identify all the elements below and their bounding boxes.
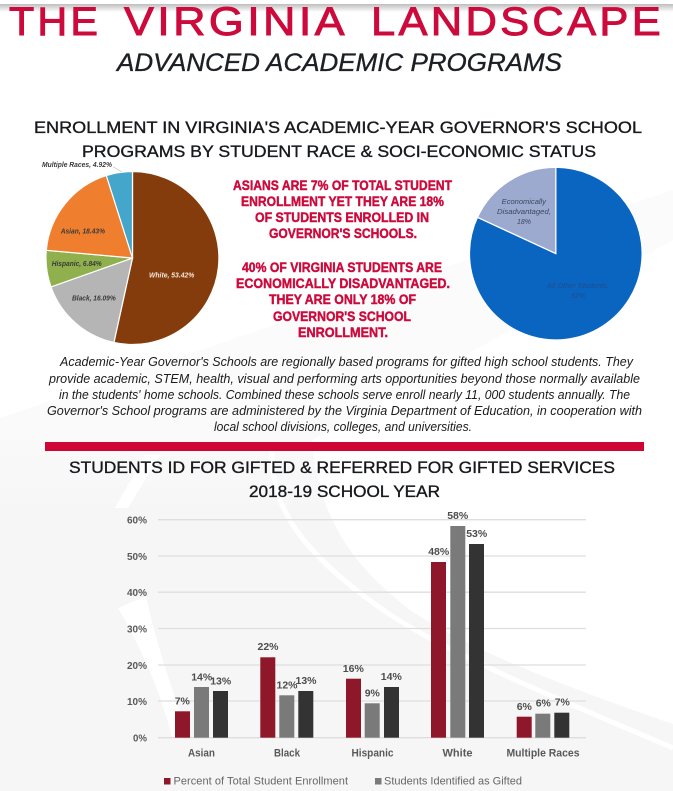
callout: Asian and economic disparity: GOVERNOR'S SCHOOL (273, 308, 411, 324)
data labels: 7% (555, 696, 571, 708)
y axis labels: 10% (127, 696, 148, 708)
data labels: 6% (517, 701, 533, 713)
divider bar (45, 442, 644, 451)
title: VIRGINIA (124, 0, 348, 44)
data labels: 13% (295, 675, 317, 687)
heading: gifted students: 2018-19 SCHOOL YEAR (249, 483, 440, 501)
pie chart: socio-economic status: All Other Students, (546, 283, 609, 290)
legend: Students Identified as Gifted (384, 776, 522, 788)
callout: Asian and economic disparity: OF STUDENTS ENROLLED IN (255, 209, 429, 225)
data labels: 58% (447, 510, 469, 522)
heading: gifted students: STUDENTS ID FOR GIFTED & REFERRED FOR GIFTED SERVICES (69, 459, 615, 477)
title: LANDSCAPE (371, 0, 664, 44)
data labels: 12% (276, 680, 298, 692)
bars: students identified as gifted (194, 526, 550, 738)
callout: Asian and economic disparity: GOVERNOR'S SCHOOLS. (269, 225, 417, 241)
data labels: 7% (175, 696, 191, 708)
callout: Asian and economic disparity: ASIANS ARE 7% OF TOTAL STUDENT (233, 177, 452, 193)
data labels: 16% (343, 663, 364, 675)
data labels (175, 510, 571, 713)
text block: program description: provide academic, STEM, health, visual and performing arts opportunities beyond those normally available (48, 372, 640, 386)
pie chart: enrollment by race: Hispanic, 6.84% (52, 261, 102, 268)
pie chart: socio-economic status: 18% (517, 219, 531, 226)
bar chart: gifted identification by race (127, 510, 586, 788)
callout: Asian and economic disparity: ENROLLMENT. (298, 324, 388, 340)
y axis labels (127, 514, 148, 744)
heading: enrollment: PROGRAMS BY STUDENT RACE & SOCI-ECONOMIC STATUS (82, 143, 596, 161)
category labels: Black (274, 748, 301, 760)
callout: Asian and economic disparity (233, 177, 452, 340)
data labels: 14% (381, 671, 402, 683)
heading: gifted students (69, 459, 615, 501)
subtitle: ADVANCED ACADEMIC PROGRAMS (115, 49, 562, 77)
data labels: 53% (466, 528, 488, 540)
y axis labels: 50% (127, 551, 148, 563)
text block: program description: Governor's School programs are administered by the Virginia Department of Education, in cooperation with (47, 404, 642, 418)
callout: Asian and economic disparity: 40% OF VIRGINIA STUDENTS ARE (242, 259, 442, 275)
category labels (188, 748, 580, 760)
y axis labels: 30% (127, 624, 148, 636)
callout: Asian and economic disparity: THEY ARE ONLY 18% OF (269, 291, 416, 307)
bars: students referred for gifted services (213, 544, 569, 738)
y axis labels: 40% (127, 587, 148, 599)
text block: program description (47, 355, 642, 434)
pie chart: enrollment by race (42, 162, 219, 344)
pie chart: socio-economic status: 82% (571, 293, 585, 300)
pie chart: enrollment by race: Asian, 18.43% (60, 228, 106, 236)
data labels: 14% (191, 672, 213, 684)
pie chart: enrollment by race: White, 53.42% (149, 272, 195, 280)
title (9, 0, 664, 44)
pie chart: socio-economic status: Economically (502, 199, 547, 206)
callout: Asian and economic disparity: ENROLLMENT YET THEY ARE 18% (241, 193, 444, 209)
data labels: 6% (536, 698, 552, 710)
title: THE (9, 0, 101, 44)
data labels: 13% (210, 676, 232, 688)
category labels: White (442, 748, 472, 760)
category labels: Multiple Races (506, 748, 580, 760)
heading: enrollment (34, 119, 642, 161)
y axis labels: 60% (127, 514, 148, 526)
legend: Percent of Total Student Enrollment (174, 776, 348, 788)
pie chart: enrollment by race: Multiple Races, 4.92% (42, 162, 113, 169)
text block: program description: in the students' home schools. Combined these schools serve enroll nearly 11, 000 students annually. The (59, 388, 630, 402)
pie chart: socio-economic status: Disadvantaged, (497, 209, 551, 216)
text block: program description: Academic-Year Governor's Schools are regionally based programs for gifted high school students. They (59, 355, 634, 369)
data labels: 9% (365, 688, 381, 700)
legend (164, 776, 522, 788)
data labels: 48% (428, 546, 450, 558)
category labels: Asian (188, 748, 215, 760)
y axis labels: 20% (127, 660, 148, 672)
data labels: 22% (257, 641, 279, 653)
heading: enrollment: ENROLLMENT IN VIRGINIA'S ACADEMIC-YEAR GOVERNOR'S SCHOOL (34, 119, 642, 137)
text block: program description: local school divisions, colleges, and universities. (214, 420, 472, 434)
pie chart: socio-economic status (469, 167, 642, 340)
pie chart: enrollment by race: Black, 16.09% (72, 296, 116, 302)
bars: percent of total enrollment (175, 562, 532, 738)
category labels: Hispanic (352, 748, 394, 760)
callout: Asian and economic disparity: ECONOMICALLY DISADVANTAGED. (236, 275, 450, 291)
y axis labels: 0% (133, 732, 148, 744)
